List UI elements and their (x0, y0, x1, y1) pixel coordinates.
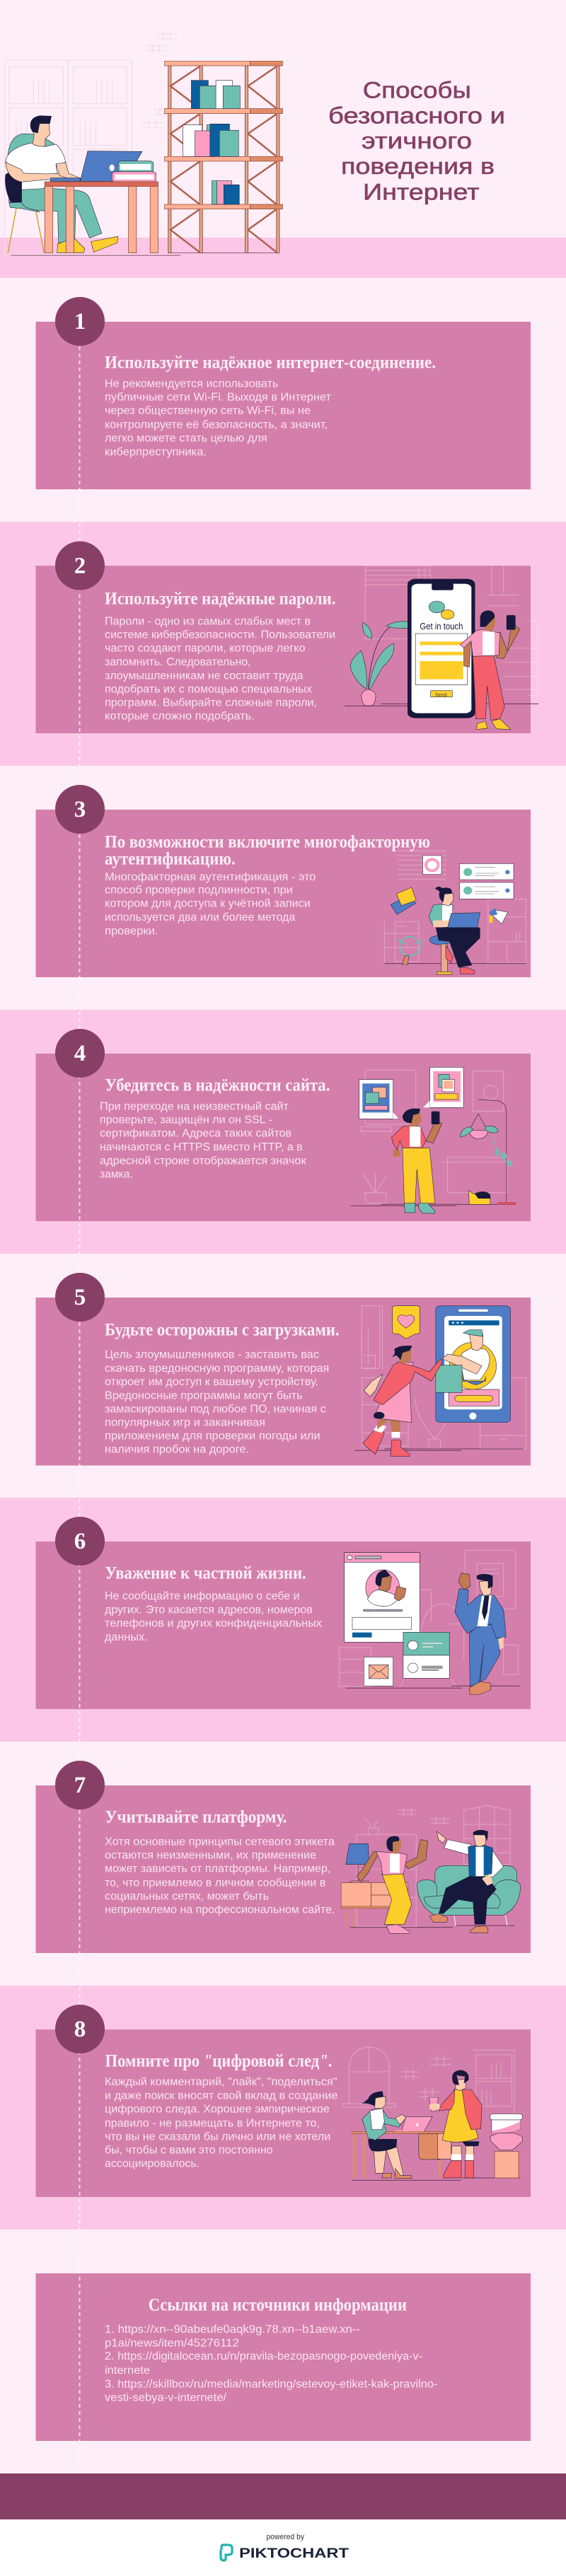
body text: телефонов и других конфиденциальных (105, 1618, 322, 1630)
body text: цифрового следа. Хорошее эмпирическое (105, 2103, 330, 2115)
illustration: two women at office desk with water cooler (343, 2047, 522, 2180)
body text: злоумышленникам не составит труда (105, 670, 304, 682)
source list: internete (105, 2365, 150, 2377)
number badge 1: 1 (74, 309, 86, 334)
heading: Уважение к частной жизни. (105, 1563, 306, 1583)
title: поведения в (341, 153, 495, 179)
panel: step 3 multifactor authentication (35, 810, 531, 977)
number badge 4: 4 (74, 1041, 86, 1066)
title: безопасного и (328, 103, 505, 128)
icon: Piktochart logo (221, 2545, 232, 2560)
body text: остаются неизменными, их применение (105, 1850, 316, 1862)
card background (35, 2029, 531, 2197)
heading: аутентификацию. (105, 849, 236, 868)
card background (35, 2273, 531, 2441)
card background (35, 1054, 531, 1221)
footer: powered by Piktochart: powered by (266, 2533, 304, 2541)
panel: step 1 reliable connection (35, 322, 531, 489)
body text: начинаются с HTTPS вместо HTTP, а в (100, 1141, 303, 1153)
illustration: woman with giant phone and contact form: Get in touch (420, 621, 463, 631)
body text: часто создают пароли, которые легко (105, 642, 306, 654)
body text: программ. Выбирайте сложные пароли, (105, 697, 317, 709)
card background (35, 566, 531, 733)
panel: sources (35, 2273, 531, 2441)
body text: Цель злоумышленников - заставить вас (105, 1349, 319, 1361)
body text: то, что приемлемо в личном сообщении в (105, 1877, 325, 1889)
illustration: profile window and man in suit (340, 1550, 520, 1695)
heading: Учитывайте платформу. (105, 1807, 287, 1826)
body text (105, 871, 316, 938)
panel: step 4 site reliability (35, 1054, 531, 1221)
heading: По возможности включите многофакторную (105, 832, 430, 851)
body text: Не рекомендуется использовать (105, 378, 278, 390)
panel: step 2 strong passwords (35, 564, 538, 733)
body text: Многофакторная аутентификация - это (105, 871, 316, 883)
title (328, 77, 505, 205)
body text: замаскированы под любое ПО, начиная с (105, 1404, 326, 1416)
title: Способы (363, 77, 471, 103)
body text (105, 615, 335, 722)
heading (105, 832, 430, 868)
footer: powered by Piktochart (221, 2533, 349, 2561)
body text: адресной строке отображается значок (100, 1155, 306, 1167)
body text: системе кибербезопасности. Пользователи (105, 629, 335, 641)
source list (105, 2324, 437, 2403)
footer: powered by Piktochart: PIKTOCHART (239, 2546, 349, 2561)
body text: скачать вредоносную программу, которая (105, 1363, 329, 1375)
number badge 6 (55, 1517, 105, 1566)
body text: которые сложно подобрать. (105, 710, 255, 722)
body text: может зависеть от платформы. Например, (105, 1863, 330, 1875)
heading: Используйте надёжные пароли. (105, 590, 335, 609)
illustration: woman with laptop on stool (384, 851, 526, 974)
illustration: woman with giant phone and contact form (345, 564, 538, 730)
source list: 2. https://digitalocean.ru/n/pravila-bezopasnogo-povedeniya-v- (105, 2350, 422, 2362)
body text: При переходе на неизвестный сайт (100, 1100, 289, 1112)
card background (35, 1298, 531, 1465)
source list: vesti-sebya-v-internete/ (105, 2391, 227, 2403)
body text: Не сообщайте информацию о себе и (105, 1590, 300, 1602)
body text: киберпреступника. (105, 446, 207, 458)
body text: социальных сетях, может быть (105, 1891, 269, 1903)
card background (35, 810, 531, 977)
title: Интернет (363, 180, 480, 205)
number badge 2 (55, 542, 105, 590)
header illustration: man at desk with bookshelf (5, 32, 282, 255)
illustration: woman with giant phone and contact form: Send (435, 693, 446, 698)
body text (105, 2076, 338, 2169)
heading: Помните про "цифровой след". (105, 2052, 332, 2071)
body text (100, 1100, 306, 1181)
title: этичного (362, 128, 472, 153)
heading: Используйте надёжное интернет-соединение. (105, 354, 436, 373)
body text: замка. (100, 1169, 133, 1181)
body text: котором для доступа к учётной записи (105, 898, 311, 910)
body text: проверьте, защищён ли он SSL - (100, 1114, 272, 1126)
number badge 6: 6 (74, 1529, 86, 1554)
body text (105, 1349, 329, 1456)
body text: сертификатом. Адреса таких сайтов (100, 1128, 291, 1140)
heading: Будьте осторожны с загрузками. (105, 1320, 340, 1339)
number badge 2: 2 (74, 553, 86, 578)
body text: неприемлемо на профессиональном сайте. (105, 1904, 335, 1916)
body text: и даже поиск вносят свой вклад в создание (105, 2090, 338, 2102)
number badge 5: 5 (74, 1285, 86, 1310)
timeline dashed connector (79, 346, 81, 2473)
number badge 7 (55, 1761, 105, 1809)
number badge 7: 7 (74, 1773, 86, 1798)
number badge 3: 3 (74, 797, 86, 822)
body text: популярных игр и заканчивая (105, 1417, 265, 1429)
body text: используется два или более метода (105, 911, 296, 923)
panel: step 5 careful downloads (35, 1298, 531, 1465)
number badge 1 (55, 297, 105, 346)
body text: через общественную сеть Wi-Fi, вы не (105, 405, 311, 417)
card background (35, 1785, 531, 1953)
body text: способ проверки подлинности, при (105, 884, 293, 896)
number badge 8: 8 (74, 2017, 86, 2042)
body text: подобрать их с помощью специальных (105, 683, 312, 695)
body text: что вы не сказали бы лично или не хотели (105, 2131, 330, 2143)
body text (105, 1836, 335, 1916)
body text: бы, чтобы с вами это постоянно (105, 2145, 273, 2157)
number badge 4 (55, 1029, 105, 1078)
body text: проверки. (105, 926, 158, 938)
body text: наличия пробок на дороге. (105, 1444, 249, 1456)
body text: Вредоносные программы могут быть (105, 1389, 303, 1401)
source list: 3. https://skillbox/ru/media/marketing/setevoy-etiket-kak-pravilno- (105, 2378, 437, 2390)
card background (35, 322, 531, 489)
panel: step 7 consider the platform (35, 1785, 531, 1953)
body text (105, 378, 331, 458)
body text: откроет им доступ к вашему устройству. (105, 1376, 318, 1388)
body text: публичные сети Wi-Fi. Выходя в Интернет (105, 391, 331, 403)
card background (35, 1541, 531, 1709)
body text (105, 1590, 322, 1643)
body text: Пароли - одно из самых слабых мест в (105, 615, 311, 627)
body text: ассоциировалось. (105, 2157, 200, 2169)
source list: p1ai/news/item/45276112 (105, 2337, 239, 2349)
heading: Ссылки на источники информации (149, 2295, 407, 2314)
body text: Хотя основные принципы сетевого этикета (105, 1836, 335, 1848)
number badge 5 (55, 1273, 105, 1322)
number badge 3 (55, 785, 105, 834)
body text: других. Это касается адресов, номеров (105, 1604, 313, 1616)
illustration: woman and man talking by sofa (341, 1805, 521, 1933)
body text: данных. (105, 1631, 148, 1643)
panel: step 8 digital footprint (35, 2029, 531, 2197)
illustration: woman shopping from phone (354, 1306, 526, 1456)
body text: приложением для проверки погоды или (105, 1430, 320, 1443)
body text: запомнить. Следовательно, (105, 656, 251, 668)
body text: контролируете её безопасность, а значит, (105, 419, 328, 431)
panel: step 6 privacy (35, 1541, 531, 1709)
body text: легко можете стать целью для (105, 433, 267, 445)
body text: Каждый комментарий, "лайк", "поделиться" (105, 2076, 337, 2088)
source list: 1. https://xn--90abeufe0aqk9g.78.xn--b1aew.xn-- (105, 2324, 360, 2336)
body text: правило - не размещать в Интернете то, (105, 2117, 320, 2129)
heading: Убедитесь в надёжности сайта. (105, 1076, 330, 1095)
illustration: woman with phone and photo bubbles (351, 1067, 516, 1213)
number badge 8 (55, 2005, 105, 2053)
